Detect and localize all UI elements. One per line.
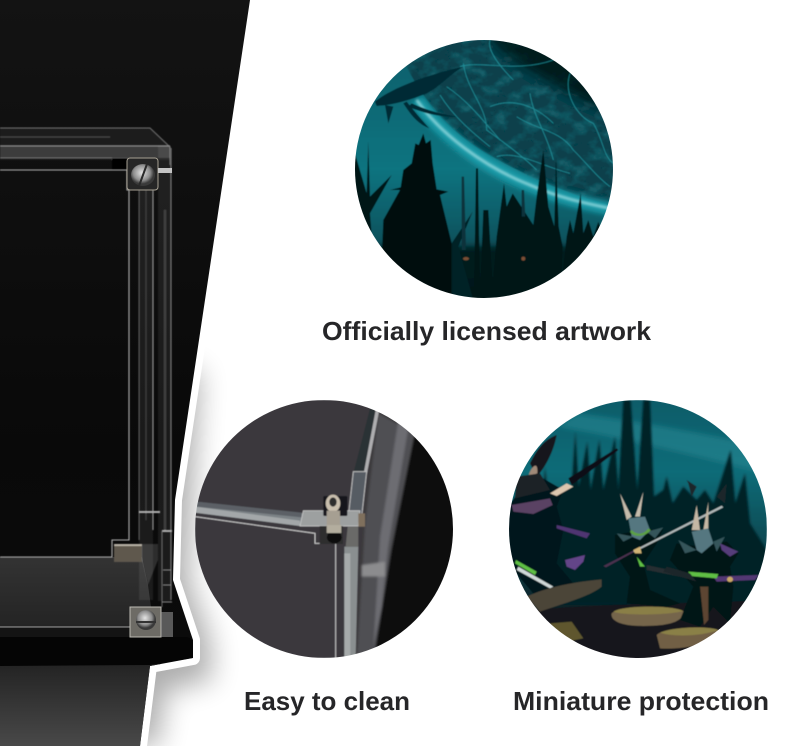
vertical acrylic edge top xyxy=(354,409,375,470)
veins on planet xyxy=(440,40,613,187)
shelf under floor xyxy=(0,628,130,637)
soft shadow on the white background xyxy=(0,370,212,746)
notch beside top bracket xyxy=(112,158,128,170)
background spires xyxy=(533,400,767,603)
case top rim xyxy=(0,128,170,170)
vertical acrylic pillar xyxy=(344,547,358,657)
glowing horizon arc xyxy=(417,100,610,208)
bottom screw bracket xyxy=(130,607,173,637)
dark right background xyxy=(375,436,453,648)
right side acrylic pillars xyxy=(139,146,172,607)
panel: easy to clean xyxy=(195,400,462,716)
left miniature figure xyxy=(508,435,618,593)
acrylic case photo contents xyxy=(0,128,200,746)
acrylic corner close-up circle xyxy=(195,400,462,667)
dark planet upper right xyxy=(407,30,617,207)
caption: easy to clean: Easy to clean xyxy=(244,686,410,716)
main tower silhouette xyxy=(382,134,452,294)
inner panel outline xyxy=(195,517,336,660)
black acrylic base plate xyxy=(0,637,193,666)
city spires xyxy=(355,144,600,298)
right base xyxy=(657,627,718,649)
centre miniature figure xyxy=(603,492,723,607)
dark angled photo background with white outline xyxy=(0,0,250,746)
caption: miniature protection: Miniature protection xyxy=(513,686,769,716)
floor front edge line xyxy=(0,626,130,628)
right miniature figure xyxy=(663,480,758,627)
top screw bracket xyxy=(127,158,172,190)
case floor xyxy=(0,557,151,627)
panel: miniature protection xyxy=(508,400,777,716)
flying ship xyxy=(375,67,463,128)
horizontal acrylic edge xyxy=(197,506,302,524)
grey reflective band xyxy=(357,413,415,660)
artwork circle xyxy=(355,40,613,298)
miniatures diorama circle xyxy=(508,400,777,667)
caption: officially licensed artwork: Officially licensed artwork xyxy=(322,316,652,346)
small ember lights xyxy=(463,257,525,261)
left base xyxy=(527,579,602,612)
mottled planet texture xyxy=(406,40,613,199)
centre base xyxy=(612,607,684,626)
lower metal corner block xyxy=(114,544,158,585)
grey surface under the base xyxy=(0,664,160,746)
dark ground xyxy=(538,601,744,658)
lower city haze xyxy=(379,240,566,298)
light band in the sky xyxy=(557,413,767,473)
panel: officially licensed artwork xyxy=(322,20,652,346)
panel: product photo of acrylic display case xyxy=(0,0,250,746)
screw and bolt xyxy=(320,495,347,544)
inner panel outline xyxy=(0,170,129,557)
